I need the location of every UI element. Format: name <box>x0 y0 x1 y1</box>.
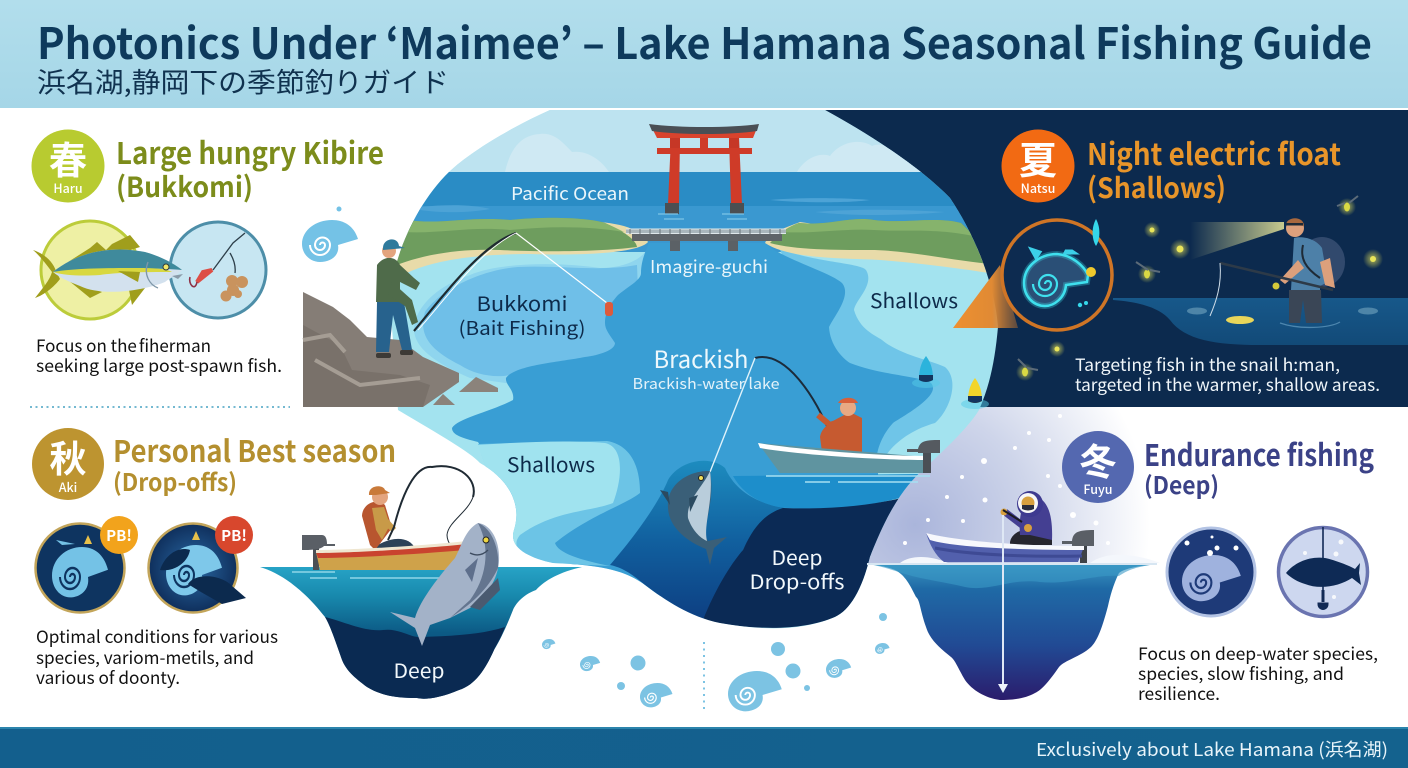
rod and line <box>755 357 832 438</box>
winter heading <box>1144 431 1374 501</box>
depth line arrow <box>998 515 1008 693</box>
winter description <box>1138 640 1378 705</box>
autumn heading: Personal Best season <box>113 427 396 471</box>
lake shallows left lobe <box>423 265 640 376</box>
zone label: Shallows left: Shallows <box>507 449 595 478</box>
winter badge: Fuyu <box>1083 479 1113 498</box>
shallows medium band <box>478 441 640 566</box>
zone label: Brackish: Brackish <box>654 340 748 375</box>
spring description: seeking large post-spawn fish. <box>36 352 282 377</box>
icon: blue shell near rock <box>302 206 358 262</box>
fisherman on shore <box>376 233 613 358</box>
footer band <box>0 727 1408 768</box>
zone label: Bait Fishing: (Bait Fishing) <box>458 314 586 341</box>
winter boat with fisherman <box>926 491 1094 563</box>
island right <box>770 219 990 264</box>
icon: winter fish circle <box>1278 527 1368 616</box>
autumn water pit <box>260 567 582 699</box>
icon: bait hook circle <box>170 222 266 318</box>
summer badge <box>1002 130 1074 202</box>
boat water <box>733 474 918 508</box>
vertical dotted divider <box>703 642 705 712</box>
panel: spring <box>32 129 384 377</box>
icon: shell PB badge: PB! <box>106 525 132 546</box>
shallows light patch <box>478 442 620 546</box>
autumn badge <box>32 428 104 500</box>
central lake map <box>380 105 1020 635</box>
ocean <box>400 172 977 252</box>
zone label: Shallows right: Shallows <box>870 285 958 314</box>
summer description: Targeting fish in the snail h:man, <box>1075 351 1340 376</box>
icon: winter shell circle <box>1167 528 1255 616</box>
fish in night water <box>1187 308 1378 324</box>
spring heading: (Bukkomi) <box>116 166 253 206</box>
winter heading: Endurance fishing <box>1144 431 1374 475</box>
icon: shell and fish PB badge <box>148 516 253 612</box>
zone label: Bukkomi: Bukkomi <box>476 288 568 317</box>
panel: autumn <box>32 427 582 699</box>
summer description: targeted in the warmer, shallow areas. <box>1075 371 1380 396</box>
headlamp beam <box>1190 222 1284 260</box>
header band <box>0 0 1408 108</box>
autumn badge: Aki <box>59 477 77 496</box>
dotted divider left <box>30 406 290 408</box>
subtitle: 浜名湖,静岡下の季節釣りガイド <box>37 60 449 100</box>
winter heading: (Deep) <box>1144 466 1219 501</box>
icon: yellowtail fish circle <box>33 221 183 319</box>
shallow night water <box>1113 298 1408 345</box>
water label: Imagire-guchi: Imagire-guchi <box>650 254 768 279</box>
summer badge: Natsu <box>1021 178 1055 197</box>
main lake deep water <box>452 243 933 600</box>
summer heading: (Shallows) <box>1087 167 1226 207</box>
lake shallows right band <box>780 250 952 454</box>
summer heading <box>1087 130 1341 207</box>
autumn boat with fisherman <box>302 466 474 570</box>
floats in shallows <box>912 356 989 409</box>
spring description: Focus on thefiherman <box>36 332 211 357</box>
zone label: Brackish-water lake: Brackish-water lake <box>632 373 780 394</box>
rocky shore <box>303 292 498 407</box>
summer heading: Night electric float <box>1087 130 1341 174</box>
footer note: Exclusively about Lake Hamana (浜名湖) <box>1036 736 1388 762</box>
sand right <box>765 222 995 274</box>
snowflakes <box>903 414 1110 545</box>
spring badge: Haru <box>53 178 83 197</box>
orange spotlight cone <box>953 265 1018 328</box>
clouds <box>505 134 925 172</box>
summer description <box>1075 351 1380 396</box>
autumn Deep label: Deep <box>394 655 444 684</box>
spring badge <box>32 130 104 202</box>
autumn heading <box>113 427 396 498</box>
autumn description <box>36 623 278 689</box>
winter badge: 冬 <box>1080 432 1116 486</box>
water label: Pacific Ocean: Pacific Ocean <box>511 180 629 206</box>
brackish fisherman in boat <box>710 357 940 482</box>
fireflies <box>1016 196 1383 381</box>
winter description: resilience. <box>1138 680 1220 705</box>
sky <box>449 110 922 173</box>
panel: winter background glow <box>860 407 1170 564</box>
panel: summer night background <box>820 110 1408 407</box>
torii gate <box>649 124 759 219</box>
island left <box>397 218 637 264</box>
deep drop-offs navy <box>703 495 912 628</box>
autumn badge: 秋 <box>50 429 86 483</box>
autumn description: Optimal conditions for various <box>36 623 278 648</box>
winter description: species, slow fishing, and <box>1138 660 1344 685</box>
panel: winter <box>867 414 1378 705</box>
zone label: Drop-offs: Drop-offs <box>750 566 844 595</box>
spring badge: 春 <box>49 130 87 185</box>
icon: neon shell circle <box>1002 219 1112 330</box>
deep gradient water <box>610 461 785 620</box>
autumn description: various of doonty. <box>36 664 180 689</box>
sand left <box>397 222 648 272</box>
spring description <box>36 332 282 377</box>
summer fisherman <box>1210 218 1345 327</box>
winter badge <box>1062 431 1134 503</box>
hooked fish in lake <box>660 471 727 565</box>
bridge <box>626 229 786 251</box>
spring heading <box>116 129 384 206</box>
spring heading: Large hungry Kibire <box>116 129 384 173</box>
scattered shells and bubbles <box>542 613 890 711</box>
autumn tuna <box>390 523 500 646</box>
panel: summer <box>953 130 1408 396</box>
lake shallows left ring <box>414 248 655 385</box>
winter description: Focus on deep-water species, <box>1138 640 1378 665</box>
summer badge: 夏 <box>1019 130 1057 185</box>
zone label: Deep: Deep <box>772 542 822 571</box>
icon: shell and fish PB badge: PB! <box>221 525 247 546</box>
autumn heading: (Drop-offs) <box>113 463 237 498</box>
title: Photonics Under ‘Maimee’ – Lake Hamana Seasonal Fishing Guide <box>37 10 1372 72</box>
autumn description: species, variom-metils, and <box>36 644 254 669</box>
winter ice pit <box>867 555 1160 700</box>
icon: shell PB badge <box>36 516 138 612</box>
